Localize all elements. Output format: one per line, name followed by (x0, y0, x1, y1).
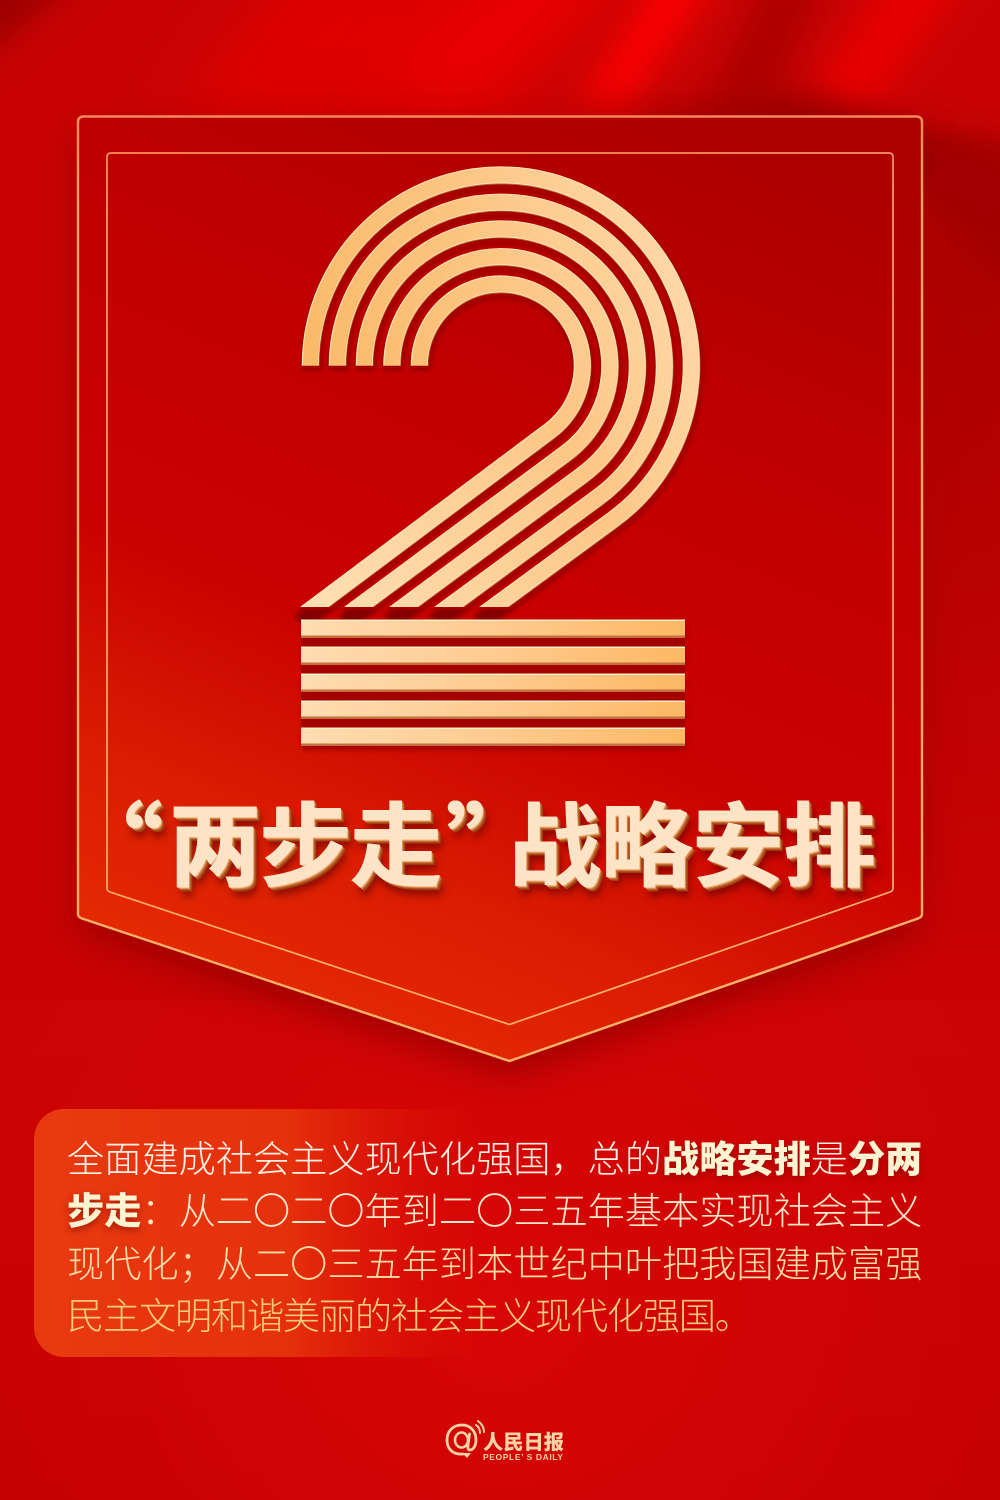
title: 战略安排 (509, 773, 875, 906)
logo: People's Daily: 人民日报 (483, 1426, 564, 1455)
description text (66, 1129, 922, 1340)
description text: 全面建成社会主义现代化强国，总的战略安排是分两 (67, 1129, 922, 1183)
title: ” (446, 773, 538, 906)
upper arcs and diagonal stripes (299, 175, 693, 623)
title: 两步走 (169, 773, 441, 906)
description text: 现代化；从二〇三五年到本世纪中叶把我国建成富强 (67, 1234, 922, 1288)
description text: 民主文明和谐美丽的社会主义现代化强国。 (67, 1286, 751, 1340)
title (71, 773, 882, 906)
five horizontal stripes (301, 620, 686, 750)
description text: 步走：从二〇二〇年到二〇三五年基本实现社会主义 (67, 1181, 922, 1235)
title: “ (71, 773, 163, 906)
logo: People's Daily (446, 1420, 564, 1462)
big numeral 2 built from five gold stripes (294, 166, 705, 752)
logo: People's Daily: PEOPLE’ S DAILY (483, 1452, 563, 1462)
